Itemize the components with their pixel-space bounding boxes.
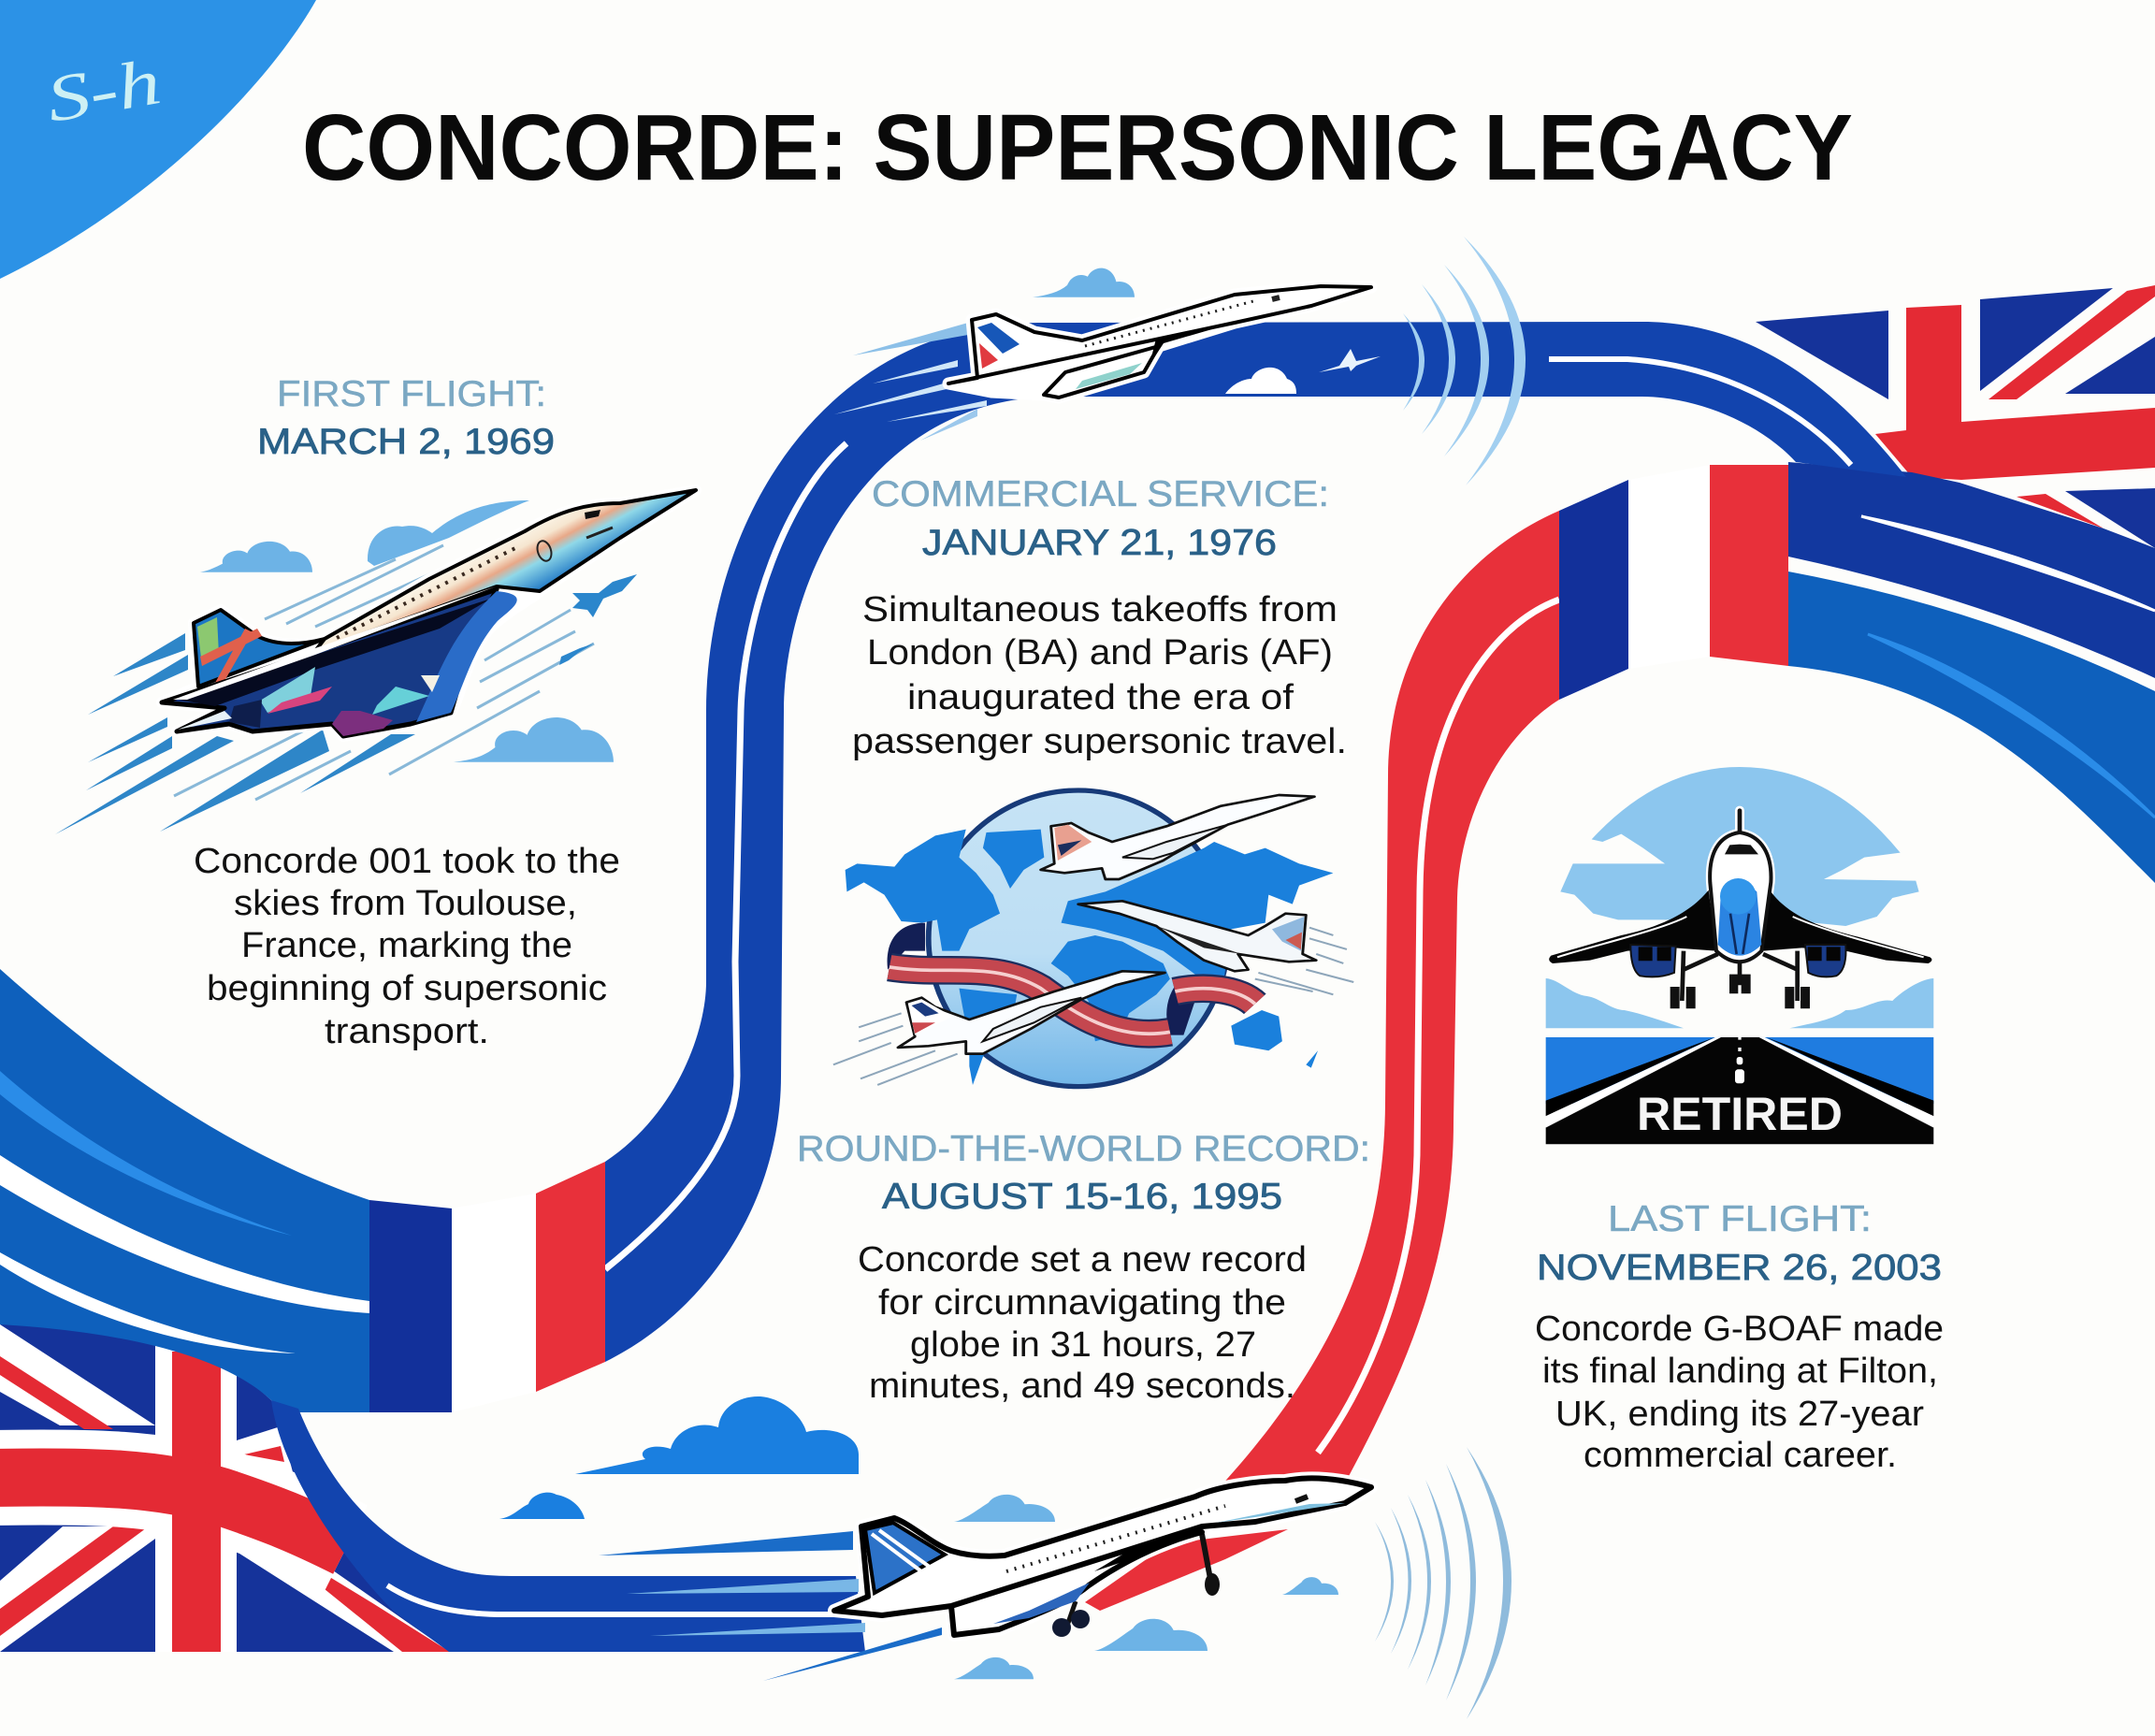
text: record description: for circumnavigating the	[878, 1283, 1286, 1323]
text: last flight description: commercial career.	[1584, 1436, 1897, 1475]
text: last flight description: UK, ending its 27-year	[1555, 1395, 1924, 1434]
title: CONCORDE: SUPERSONIC LEGACY	[302, 95, 1853, 200]
text: commercial service description: Simultaneous takeoffs from	[862, 590, 1338, 629]
heading: last flight	[1537, 1199, 1942, 1288]
clouds	[200, 268, 1338, 1679]
flag: union jack bottom left	[0, 1324, 450, 1652]
text: record description	[858, 1240, 1307, 1406]
icon: white plane on ribbon	[1319, 349, 1381, 372]
sound waves top	[1403, 237, 1526, 485]
heading: commercial service: JANUARY 21, 1976	[922, 523, 1277, 563]
text: first flight description: beginning of supersonic	[207, 969, 607, 1008]
ribbon: red route	[1085, 511, 1559, 1611]
plane: bottom route	[834, 1478, 1371, 1637]
text: last flight description: its final landing at Filton,	[1542, 1352, 1938, 1391]
text: last flight description	[1535, 1309, 1944, 1475]
heading: round-the-world record: ROUND-THE-WORLD RECORD:	[797, 1129, 1370, 1169]
retired badge	[1546, 767, 1933, 1144]
plane: first flight	[55, 490, 696, 834]
heading: round-the-world record: AUGUST 15-16, 1995	[882, 1177, 1282, 1217]
retired badge: RETIRED	[1637, 1088, 1843, 1140]
corner shape with signature: S-h	[41, 46, 166, 137]
text: record description: globe in 31 hours, 27	[910, 1325, 1256, 1365]
icon: small blue planes	[559, 574, 637, 665]
text: commercial service description: passenger supersonic travel.	[852, 722, 1347, 761]
plane: top route	[834, 286, 1371, 441]
ribbon: blue bottom route	[271, 1400, 942, 1681]
heading: first flight: MARCH 2, 1969	[257, 422, 555, 462]
text: record description: minutes, and 49 seconds.	[869, 1367, 1295, 1406]
text: commercial service description	[852, 590, 1347, 761]
text: first flight description: skies from Toulouse,	[234, 884, 577, 923]
ribbon: right blue bands	[1788, 462, 2155, 883]
heading: commercial service: COMMERCIAL SERVICE:	[872, 474, 1329, 514]
ribbon: left blue bands	[0, 969, 369, 1412]
clouds: bright blue	[499, 1396, 859, 1519]
sound waves bottom	[1375, 1447, 1511, 1719]
corner shape with signature	[0, 0, 316, 279]
heading: commercial service	[872, 474, 1329, 563]
ribbon: french tricolour upper right	[1559, 465, 1788, 700]
cloud: white on ribbon	[1225, 368, 1296, 394]
heading: last flight: NOVEMBER 26, 2003	[1537, 1248, 1942, 1288]
flag: union jack top right	[1756, 285, 2155, 548]
text: first flight description: Concorde 001 took to the	[194, 842, 620, 881]
heading: first flight: FIRST FLIGHT:	[277, 374, 546, 414]
ribbon: blue top route	[605, 322, 1906, 1362]
heading: first flight	[257, 374, 555, 462]
text: first flight description: transport.	[325, 1012, 489, 1051]
globe with planes and ribbon	[833, 790, 1353, 1087]
text: first flight description: France, marking the	[241, 926, 572, 965]
text: record description: Concorde set a new record	[858, 1240, 1307, 1280]
heading: last flight: LAST FLIGHT:	[1608, 1199, 1872, 1239]
text: commercial service description: London (BA) and Paris (AF)	[867, 633, 1333, 673]
ribbon: french tricolour lower left	[369, 1162, 605, 1412]
heading: round-the-world record	[797, 1129, 1370, 1217]
text: commercial service description: inaugurated the era of	[907, 678, 1294, 717]
text: first flight description	[194, 842, 620, 1051]
text: last flight description: Concorde G-BOAF made	[1535, 1309, 1944, 1349]
